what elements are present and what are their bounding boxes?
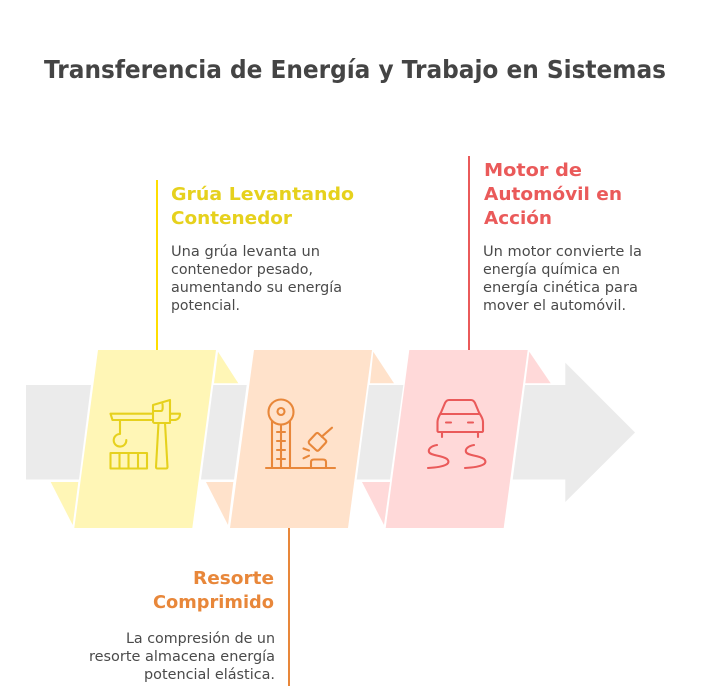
callout: spring xyxy=(89,528,290,686)
callout: spring: resorte almacena energía xyxy=(89,649,275,665)
title: Transferencia de Energía y Trabajo en Sistemas xyxy=(44,55,666,84)
callout: engine: Automóvil en xyxy=(484,184,622,205)
callout: crane: contenedor pesado, xyxy=(171,262,313,278)
grey arrow background xyxy=(26,363,635,502)
panel: engine step xyxy=(362,350,551,528)
callout: engine: energía cinética para xyxy=(483,280,638,296)
callout: crane: Contenedor xyxy=(171,208,292,229)
callout: engine: energía química en xyxy=(483,262,620,278)
callout: crane: aumentando su energía xyxy=(171,280,342,296)
callout: crane xyxy=(156,180,354,350)
callout: spring: Comprimido xyxy=(153,592,274,613)
callout: engine: Motor de xyxy=(484,160,582,181)
callout: crane: potencial. xyxy=(171,298,240,314)
callout: engine: mover el automóvil. xyxy=(483,298,626,314)
icon: spring hammer xyxy=(266,400,335,468)
panel: spring step xyxy=(206,350,394,528)
callout: engine xyxy=(468,156,642,350)
callout: engine: Un motor convierte la xyxy=(483,244,642,260)
callout: crane: Grúa Levantando xyxy=(171,184,354,205)
icon: crane xyxy=(110,400,180,468)
callout: spring: potencial elástica. xyxy=(144,667,275,683)
callout: spring: Resorte xyxy=(193,568,274,589)
callout: spring: La compresión de un xyxy=(126,631,275,647)
callout: crane: Una grúa levanta un xyxy=(171,244,320,260)
callout: engine: Acción xyxy=(484,208,552,229)
icon: car xyxy=(428,400,485,468)
panel: crane step xyxy=(51,350,238,528)
